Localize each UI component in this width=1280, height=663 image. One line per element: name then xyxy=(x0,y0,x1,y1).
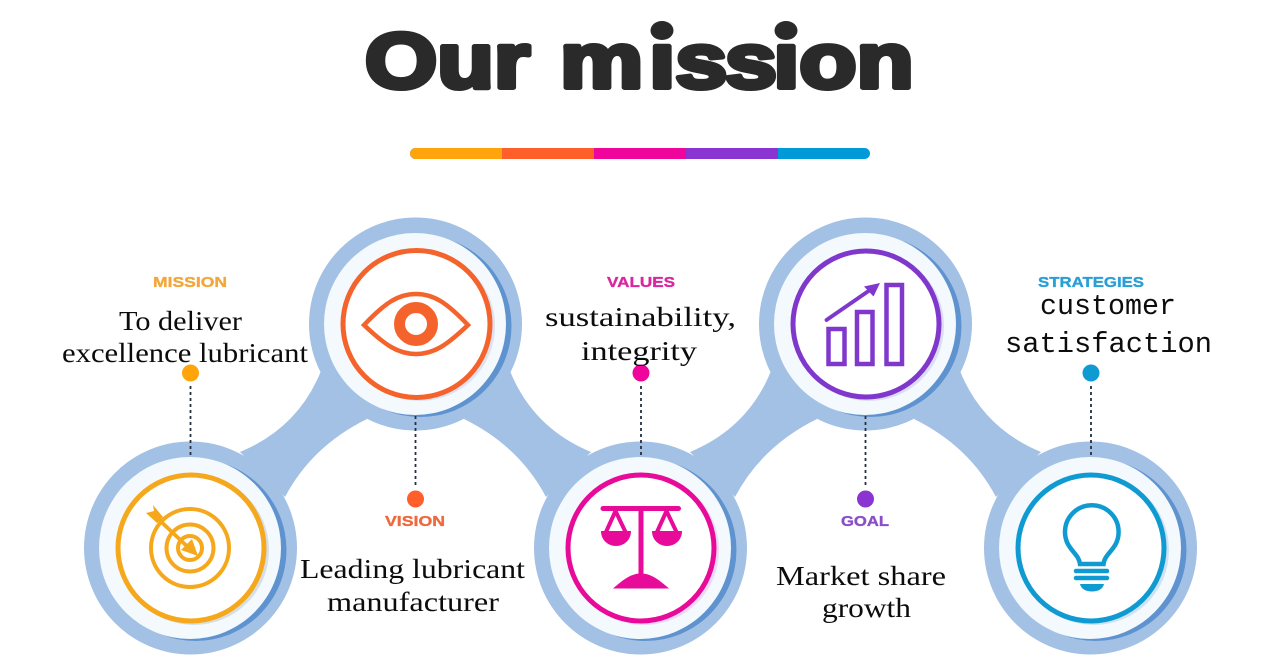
node: vision eye xyxy=(309,218,522,430)
callout: goal: GOAL xyxy=(841,514,889,530)
title colour bar xyxy=(410,148,870,159)
callout: goal xyxy=(776,416,946,623)
callout: mission: To deliver xyxy=(119,306,242,336)
node: goal chart xyxy=(759,218,972,430)
callout: vision: Leading lubricant xyxy=(300,554,526,584)
callout: goal: Market share xyxy=(776,561,946,591)
title: mission xyxy=(560,18,914,105)
callout: mission xyxy=(62,275,309,458)
callout: strategies xyxy=(1005,275,1212,456)
timeline connectors xyxy=(240,371,1041,497)
icon: eye xyxy=(364,294,468,354)
icon: light bulb xyxy=(1065,505,1119,592)
callout: goal: growth xyxy=(822,593,912,623)
callout: values: VALUES xyxy=(607,275,675,291)
node: mission target xyxy=(84,442,297,654)
callout: vision: VISION xyxy=(385,514,445,530)
node: strategies bulb xyxy=(984,442,1197,654)
callout: mission: excellence lubricant xyxy=(62,338,309,368)
icon: rising bar chart xyxy=(826,283,902,364)
callout: vision xyxy=(300,416,526,617)
node: values scales xyxy=(534,442,747,654)
callout: values: sustainability, xyxy=(545,302,736,332)
callout: strategies: STRATEGIES xyxy=(1038,275,1144,291)
callout: values: integrity xyxy=(581,336,698,366)
callout: strategies: satisfaction xyxy=(1005,328,1212,361)
callout: values xyxy=(545,275,736,458)
icon: balance scales xyxy=(600,506,682,588)
callout: mission: MISSION xyxy=(153,275,227,291)
callout: vision: manufacturer xyxy=(327,587,499,617)
icon: target with arrow xyxy=(146,505,229,587)
title xyxy=(365,17,914,105)
title: Our xyxy=(365,17,530,105)
callout: strategies: customer xyxy=(1040,290,1176,323)
